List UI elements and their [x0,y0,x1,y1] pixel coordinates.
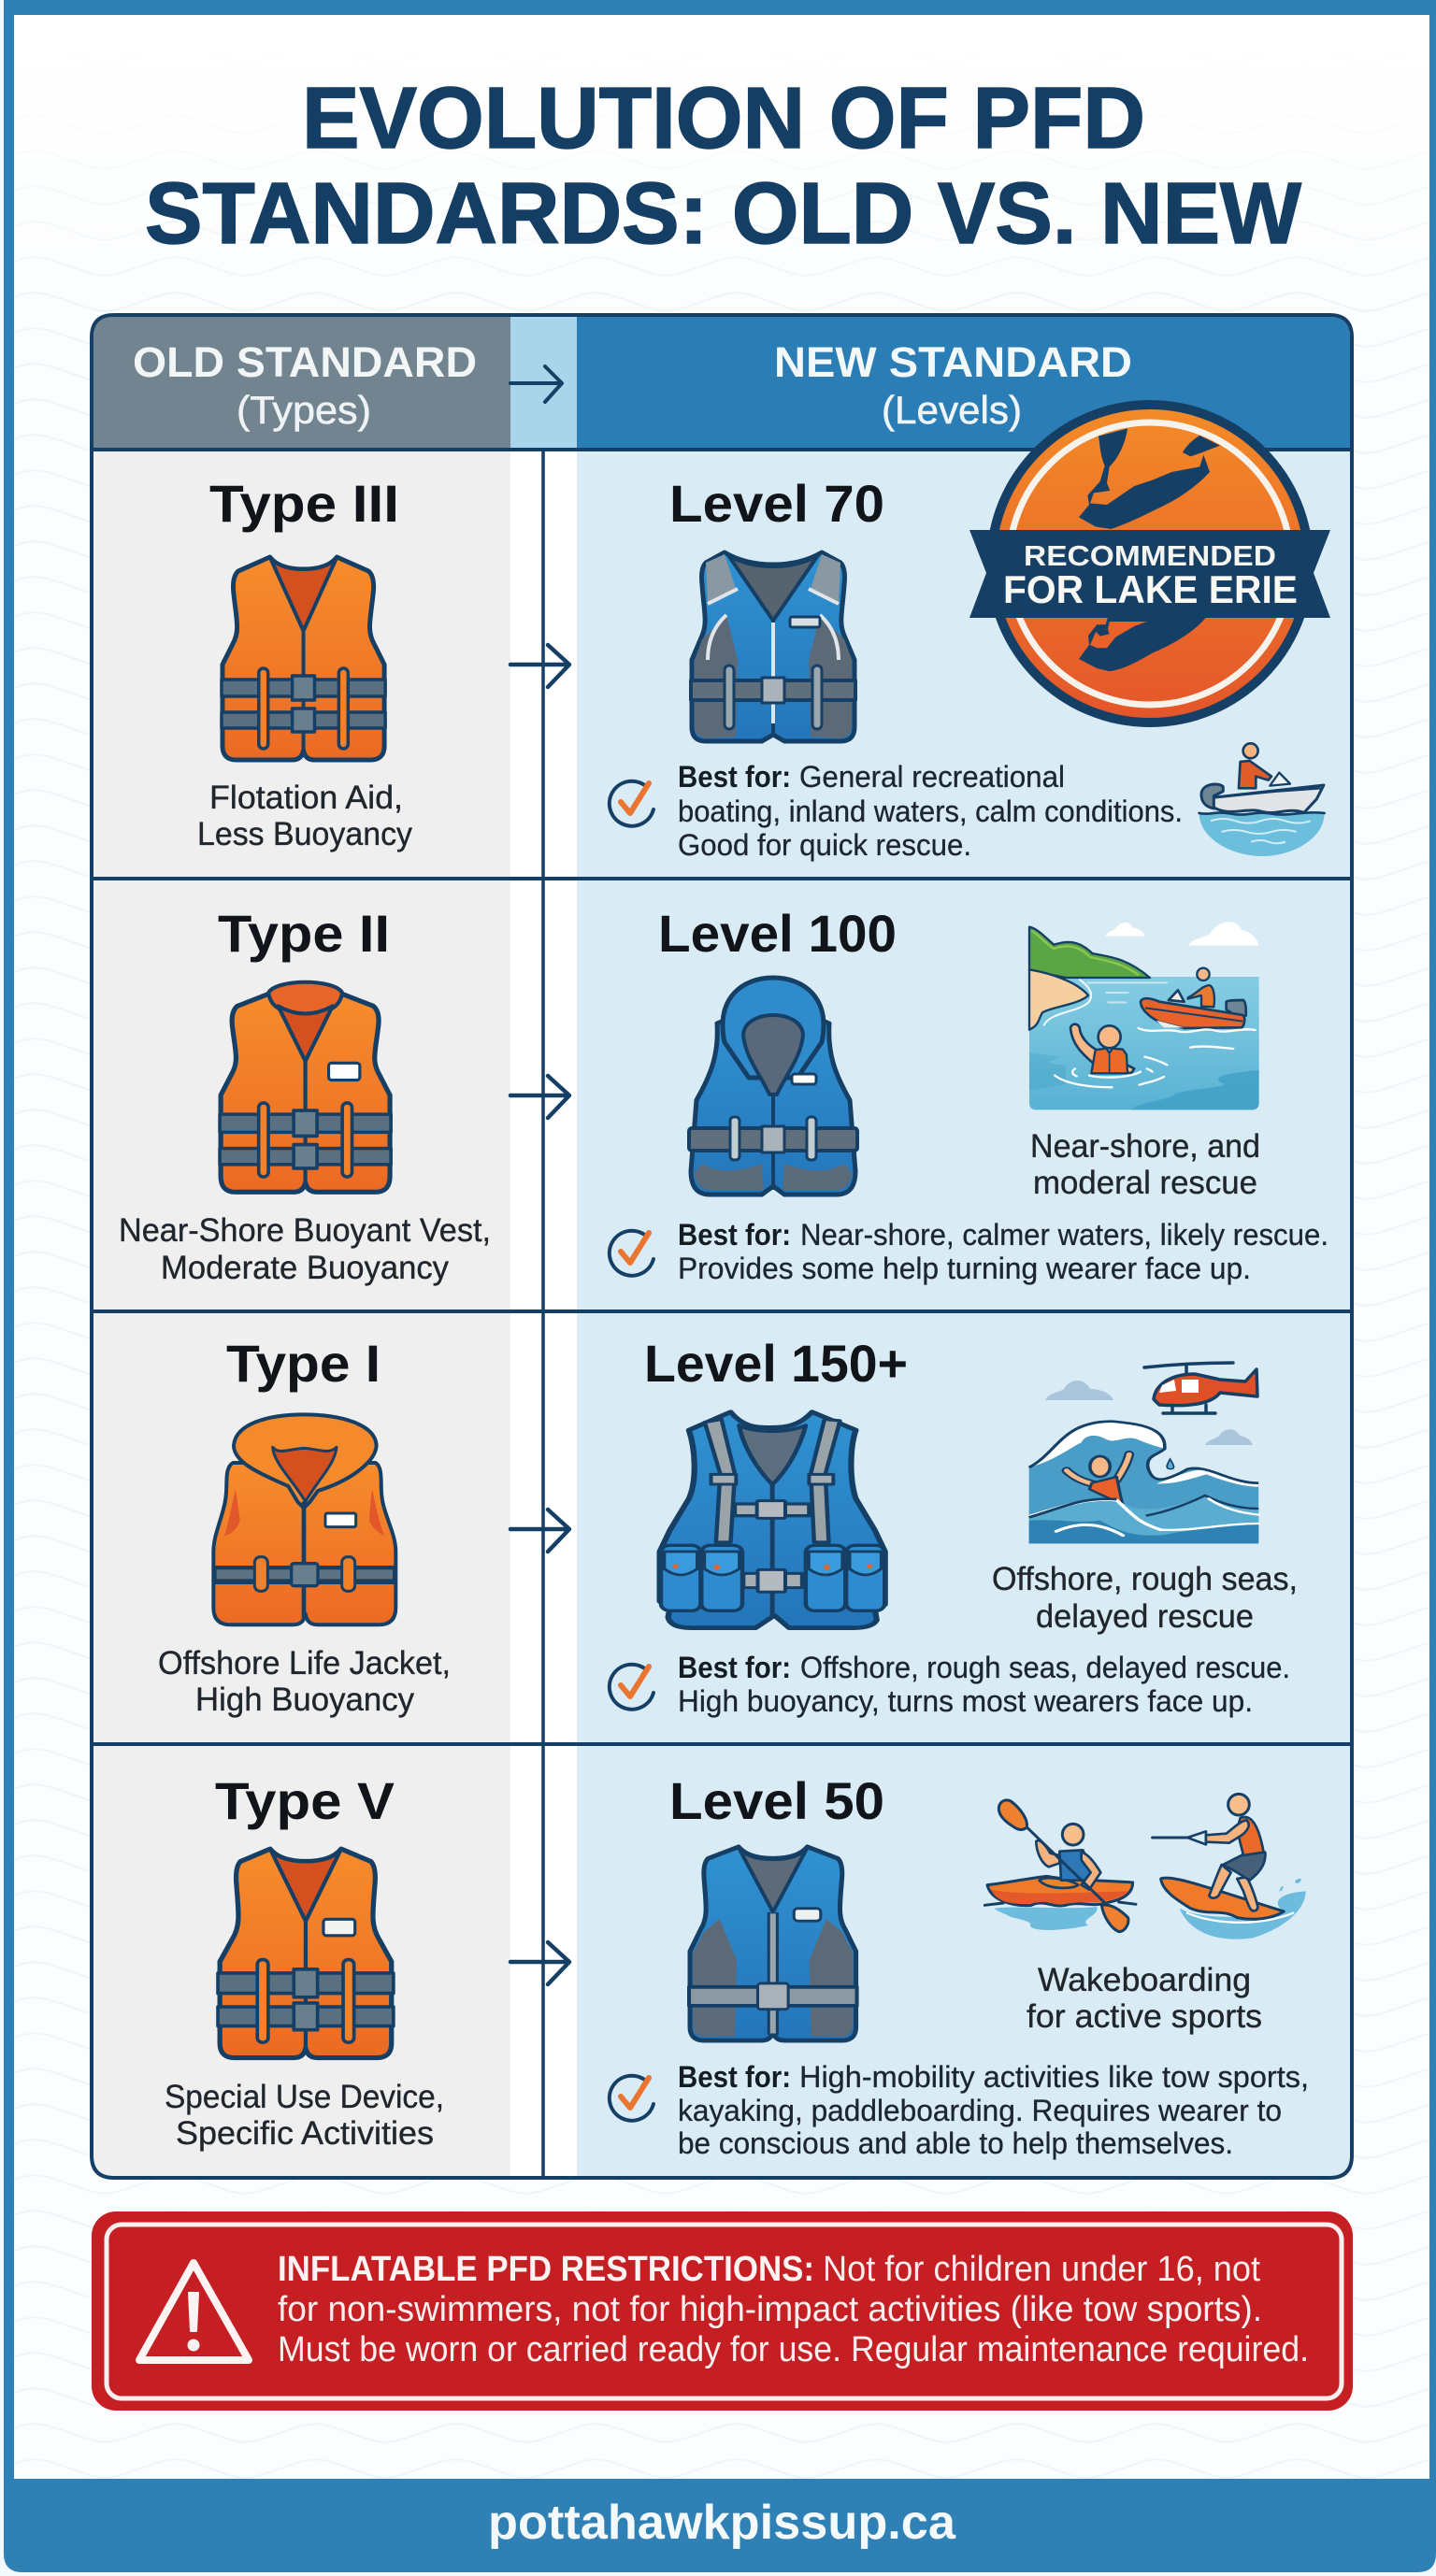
text: restrictions: INFLATABLE PFD RESTRICTIONS: [278,2250,814,2289]
heading: Type III: Type III [209,474,399,533]
text: active sports caption [1027,1962,1262,2035]
text: restrictions: Must be worn or carried ready for use. Regular maintenance required. [278,2330,1309,2369]
icon: orange vest Type I with collar [212,1414,396,1624]
panel: old standard column background [93,449,510,2176]
text: Type III description: Less Buoyancy [197,816,412,852]
text: Type III description: Flotation Aid, [209,780,403,816]
text: best for Level 50 [678,2060,1309,2160]
text: restrictions: for non-swimmers, not for high-impact activities (like tow sports). [278,2290,1262,2329]
text: restrictions: Not for children under 16, not [823,2250,1260,2289]
text: best for Level 50: High-mobility activities like tow sports, [799,2060,1309,2094]
text: best for Level 150+ [678,1651,1290,1718]
text: best for Level 70: Good for quick rescue. [678,828,971,862]
text: best for Level 100 [678,1218,1328,1285]
text: rough seas caption [992,1561,1298,1635]
table grid lines [92,315,1352,2178]
title: EVOLUTION OF PFD [302,69,1145,166]
arrow: Type III to Level 70 [510,645,569,687]
row 2: Level 100 [610,904,1328,1285]
icon: orange vest Type V [218,1849,394,2058]
header: new standard: (Levels) [882,388,1022,432]
icon: check mark [610,781,653,826]
text: Type III description [197,780,412,852]
arrow: Type II to Level 100 [510,1076,569,1118]
text: best for Level 50: kayaking, paddleboarding. Requires wearer to [678,2094,1282,2127]
heading: Level 100: Level 100 [658,904,897,963]
text: Type I description: Offshore Life Jacket, [158,1645,451,1682]
row 3: Level 150+ [610,1334,1298,1718]
ribbon: FOR LAKE ERIE [1003,567,1298,611]
text: rough seas caption: delayed rescue [1036,1598,1254,1635]
lake erie silhouettes [1079,428,1220,671]
icon: check mark [610,1231,653,1276]
text: near-shore caption: Near-shore, and [1030,1128,1260,1165]
text: best for Level 150+: Offshore, rough seas, delayed rescue. [800,1651,1290,1684]
header: new standard: NEW STANDARD [774,338,1132,386]
footer website: pottahawkpissup.ca [488,2496,956,2550]
icon: orange vest Type III [222,557,385,760]
icon: warning triangle [139,2263,249,2360]
row 4: Level 50 [610,1771,1309,2160]
title [145,69,1301,262]
header: old standard: (Types) [237,388,371,432]
text: best for Level 100: Provides some help turning wearer face up. [678,1252,1251,1285]
row 2: Type II [119,904,491,1286]
text: best for Level 100: Near-shore, calmer waters, likely rescue. [800,1218,1328,1252]
arrow: Type V to Level 50 [510,1942,569,1984]
arrow: Type I to Level 150+ [510,1510,569,1552]
icon: blue vest Level 70 [691,552,855,741]
row 3: Type I [158,1334,451,1718]
header: old standard: OLD STANDARD [133,338,477,386]
heading: Level 70: Level 70 [669,474,884,533]
header: old standard [93,317,510,449]
icon: blue vest Level 100 with hood [689,978,857,1195]
text: best for Level 70: General recreational [799,760,1065,794]
heading: Level 150+: Level 150+ [644,1334,908,1393]
text: near-shore caption [1030,1128,1260,1201]
header: arrow cell [510,317,577,449]
illustration: rough seas swimmer [1029,1422,1258,1543]
ribbon [969,530,1330,618]
text: rough seas caption: Offshore, rough seas, [992,1561,1298,1597]
illustration: kayaker [984,1800,1136,1932]
badge: recommended for Lake Erie [969,400,1330,727]
icon: motor boat [1199,743,1325,856]
icon: check mark [610,2076,653,2121]
comparison table [92,315,1352,2178]
text: Type V description [165,2079,444,2152]
text: near-shore caption: moderal rescue [1033,1165,1257,1201]
illustration: near-shore rescue [1029,922,1259,1109]
heading: Type V: Type V [215,1771,395,1830]
text: best for Level 50: be conscious and able to help themselves. [678,2126,1233,2160]
row 1: Level 70 [610,474,1325,862]
text: active sports caption: for active sports [1027,1998,1262,2035]
panel: new standard column background [577,449,1350,2176]
icon: check mark [610,1665,653,1710]
text: Type II description: Near-Shore Buoyant Vest, [119,1212,491,1249]
badge circle [986,400,1314,727]
text: Type I description [158,1645,451,1718]
text: best for Level 150+: High buoyancy, turns most wearers face up. [678,1684,1253,1718]
text: Type II description: Moderate Buoyancy [161,1250,449,1286]
row 4: Type V [165,1771,444,2152]
callout: inflatable PFD restrictions [92,2211,1353,2411]
ribbon: RECOMMENDED [1024,539,1276,572]
text: best for Level 70: Best for: [678,760,791,794]
header: new standard [577,317,1350,449]
heading: Type II: Type II [218,904,390,963]
text: best for Level 70 [678,760,1183,862]
text: best for Level 100: Best for: [678,1218,791,1252]
heading: Type I: Type I [226,1334,381,1393]
text: restrictions [278,2250,1309,2369]
text: best for Level 50: Best for: [678,2060,791,2094]
title: STANDARDS: OLD VS. NEW [145,165,1301,262]
illustration: wakeboarder [1153,1794,1306,1939]
icon: blue vest Level 50 [689,1847,857,2040]
icons: clouds [1045,1381,1253,1445]
icon: orange vest Type II [220,982,391,1192]
text: Type I description: High Buoyancy [195,1682,414,1718]
text: best for Level 70: boating, inland waters, calm conditions. [678,794,1183,828]
heading: Level 50: Level 50 [669,1771,884,1830]
row 1: Type III [197,474,412,852]
text: Type V description: Special Use Device, [165,2079,444,2115]
text: active sports caption: Wakeboarding [1038,1962,1251,1998]
text: Type V description: Specific Activities [176,2115,434,2152]
illustration: helicopter [1144,1363,1257,1413]
icon: blue vest Level 150+ with pockets [660,1412,885,1628]
text: Type II description [119,1212,491,1286]
text: best for Level 150+: Best for: [678,1651,791,1684]
